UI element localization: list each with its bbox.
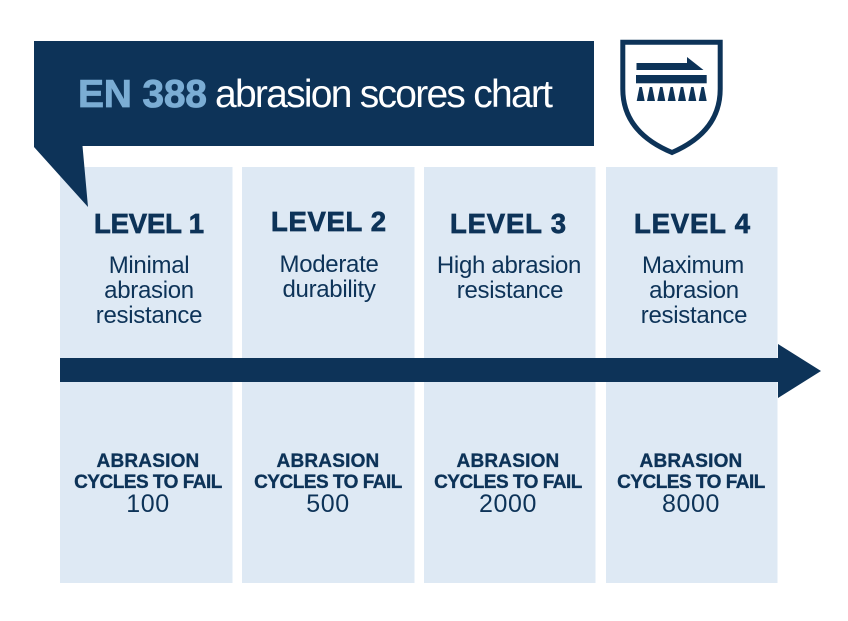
stat: level 4 cycles: 8000: [662, 490, 720, 518]
description: level 2: Moderate: [280, 251, 378, 278]
heading: level 2: LEVEL 2: [271, 206, 386, 237]
description: level 4: resistance: [641, 302, 747, 329]
panel: level 1: [60, 167, 232, 583]
description: level 1: Minimal: [109, 252, 189, 279]
description: level 1: resistance: [96, 302, 202, 329]
icon: abrasion shield: [623, 42, 720, 152]
description: level 4: abrasion: [649, 277, 739, 304]
stat: level 2 cycles: ABRASION: [277, 451, 379, 472]
heading: level 3: LEVEL 3: [450, 208, 566, 239]
stat: level 3 cycles: 2000: [479, 490, 537, 518]
panel: level 3: [424, 167, 596, 583]
stat: level 1 cycles: CYCLES TO FAIL: [74, 472, 223, 493]
title: abrasion scores chart: [215, 73, 553, 116]
stat: level 1 cycles: 100: [126, 490, 170, 518]
title banner: [34, 41, 594, 207]
stat: level 1 cycles: ABRASION: [97, 451, 199, 472]
heading: level 4: LEVEL 4: [634, 208, 751, 239]
description: level 3: resistance: [457, 277, 563, 304]
panel: level 4: [606, 167, 778, 583]
stat: level 2 cycles: CYCLES TO FAIL: [254, 472, 403, 493]
stat: level 4 cycles: ABRASION: [640, 451, 742, 472]
description: level 4: Maximum: [642, 252, 744, 279]
arrow: progression across levels: [60, 344, 821, 398]
stat: level 2 cycles: 500: [306, 490, 350, 518]
title: EN 388: [78, 73, 207, 116]
description: level 3: High abrasion: [437, 252, 581, 279]
stat: level 4 cycles: CYCLES TO FAIL: [617, 472, 766, 493]
stat: level 3 cycles: CYCLES TO FAIL: [434, 472, 583, 493]
description: level 2: durability: [282, 276, 376, 303]
description: level 1: abrasion: [104, 277, 194, 304]
stat: level 3 cycles: ABRASION: [457, 451, 559, 472]
panel: level 2: [242, 167, 414, 583]
heading: level 1: LEVEL 1: [94, 208, 204, 239]
